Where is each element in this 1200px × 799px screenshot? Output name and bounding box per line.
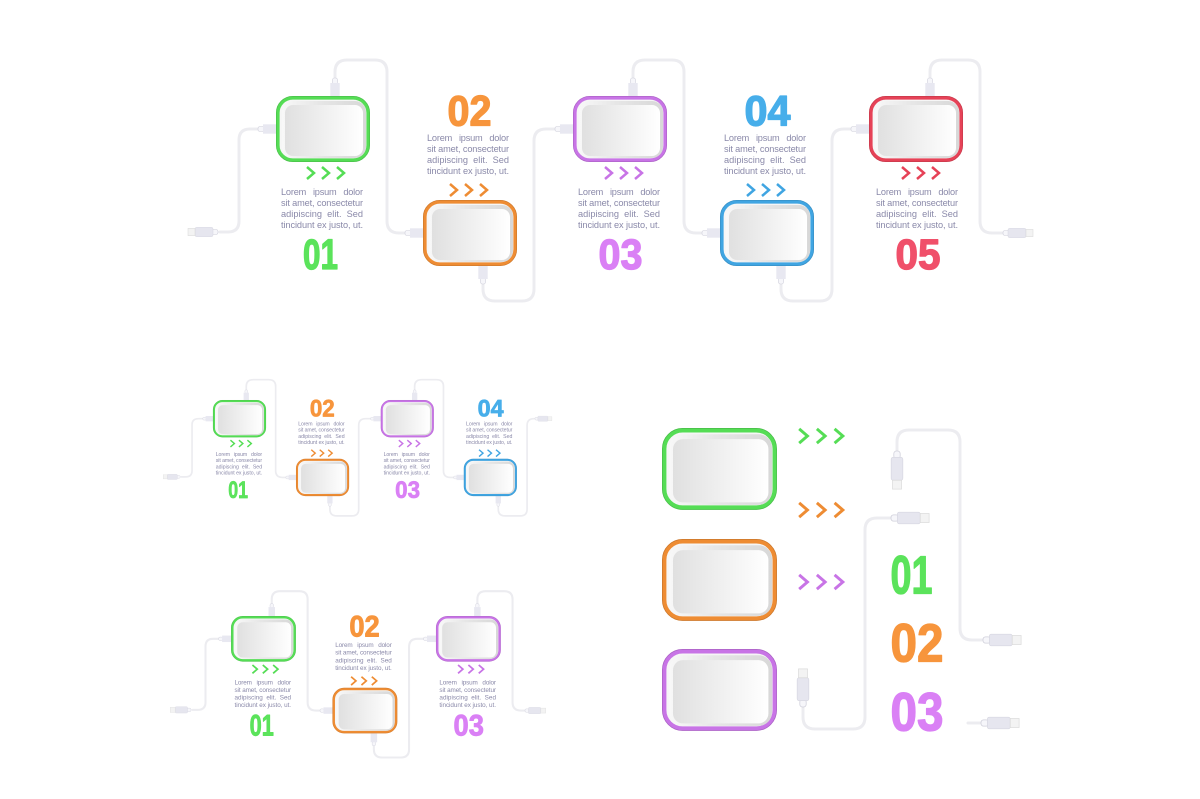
step 05: adipiscing elit. Sed <box>876 209 958 219</box>
step 04: 04 <box>744 88 791 136</box>
step 02 <box>286 396 349 506</box>
step 01: 01 <box>303 231 338 279</box>
step 01 <box>170 604 296 742</box>
step 01 <box>188 78 370 279</box>
step 03: tincidunt ex justo, ut. <box>439 702 496 709</box>
step 02: tincidunt ex justo, ut. <box>298 440 345 446</box>
step 01: sit amet, consectetur <box>234 687 291 694</box>
step 04: Lorem ipsum dolor <box>466 421 513 427</box>
step 02: sit amet, consectetur <box>427 144 509 154</box>
step 03 <box>424 604 546 742</box>
step 02: adipiscing elit. Sed <box>427 155 509 165</box>
step 04: sit amet, consectetur <box>724 144 806 154</box>
step 01: Lorem ipsum dolor <box>281 187 363 197</box>
step 05: tincidunt ex justo, ut. <box>876 220 958 230</box>
step 03: tincidunt ex justo, ut. <box>578 220 660 230</box>
number 02: 02 <box>890 614 944 674</box>
panel: design elements kit <box>662 428 1021 742</box>
step 03: tincidunt ex justo, ut. <box>384 471 430 477</box>
step 01: 01 <box>228 477 248 504</box>
step 02: adipiscing elit. Sed <box>298 434 345 440</box>
step 02: 02 <box>448 88 492 136</box>
step 02: tincidunt ex justo, ut. <box>335 665 392 672</box>
step 04: 04 <box>478 396 504 423</box>
step 05: 05 <box>896 231 940 279</box>
step 02: Lorem ipsum dolor <box>298 421 345 427</box>
step 01: adipiscing elit. Sed <box>216 464 262 470</box>
step 04: tincidunt ex justo, ut. <box>466 440 512 446</box>
step 01: Lorem ipsum dolor <box>234 679 291 686</box>
step 05 <box>851 78 1033 279</box>
step 02: sit amet, consectetur <box>335 650 392 657</box>
step 02: 02 <box>349 610 380 643</box>
step 01: sit amet, consectetur <box>281 198 363 208</box>
step 03: adipiscing elit. Sed <box>578 209 660 219</box>
step 04 <box>702 88 814 284</box>
panel: five-step timeline <box>188 60 1033 301</box>
step 04: sit amet, consectetur <box>466 428 513 434</box>
card: green <box>662 428 777 509</box>
step 02: 02 <box>310 396 335 423</box>
step 04 <box>454 396 552 506</box>
step 01: adipiscing elit. Sed <box>281 209 363 219</box>
step 03: sit amet, consectetur <box>384 458 430 464</box>
arrows: green <box>799 429 843 443</box>
panel: three-step timeline <box>170 591 546 757</box>
step 01: Lorem ipsum dolor <box>216 452 262 458</box>
card: purple <box>662 649 777 730</box>
cables <box>220 60 1003 301</box>
step 03: Lorem ipsum dolor <box>384 452 430 458</box>
step 03: adipiscing elit. Sed <box>384 464 430 470</box>
step 02 <box>320 610 397 746</box>
step 03: adipiscing elit. Sed <box>439 695 496 702</box>
step 03: sit amet, consectetur <box>439 687 496 694</box>
number 01: 01 <box>890 546 932 606</box>
cables <box>192 591 525 757</box>
cable: short with plug <box>968 717 1019 729</box>
number 03: 03 <box>890 682 944 742</box>
step 01: adipiscing elit. Sed <box>234 695 292 702</box>
step 02 <box>405 88 517 284</box>
card: orange <box>662 539 777 620</box>
arrows: orange <box>799 503 843 517</box>
step 01: 01 <box>250 709 274 742</box>
cables <box>181 380 535 516</box>
step 02: Lorem ipsum dolor <box>427 133 509 143</box>
step 01: sit amet, consectetur <box>216 458 262 464</box>
step 03: 03 <box>598 231 642 279</box>
step 03: 03 <box>395 477 420 504</box>
step 03: 03 <box>454 709 484 742</box>
step 05: Lorem ipsum dolor <box>876 187 958 197</box>
step 01: tincidunt ex justo, ut. <box>281 220 363 230</box>
cable: middle with two plugs <box>797 512 929 729</box>
step 04: tincidunt ex justo, ut. <box>724 166 806 176</box>
step 05: sit amet, consectetur <box>876 198 958 208</box>
step 02: sit amet, consectetur <box>298 428 345 434</box>
step 04: adipiscing elit. Sed <box>466 434 512 440</box>
step 03 <box>371 390 434 504</box>
arrows: purple <box>799 575 843 589</box>
step 01: tincidunt ex justo, ut. <box>234 702 291 709</box>
panel: four-step timeline <box>163 380 552 516</box>
step 04: adipiscing elit. Sed <box>724 155 806 165</box>
step 03: sit amet, consectetur <box>578 198 660 208</box>
step 01: tincidunt ex justo, ut. <box>216 471 262 477</box>
cable: upper with two plugs <box>891 430 1021 646</box>
step 04: Lorem ipsum dolor <box>724 133 806 143</box>
step 03: Lorem ipsum dolor <box>439 679 496 686</box>
step 02: tincidunt ex justo, ut. <box>427 166 509 176</box>
step 03: Lorem ipsum dolor <box>578 187 660 197</box>
step 03 <box>555 78 667 279</box>
step 01 <box>163 390 266 504</box>
step 02: Lorem ipsum dolor <box>335 642 392 649</box>
step 02: adipiscing elit. Sed <box>335 657 392 664</box>
